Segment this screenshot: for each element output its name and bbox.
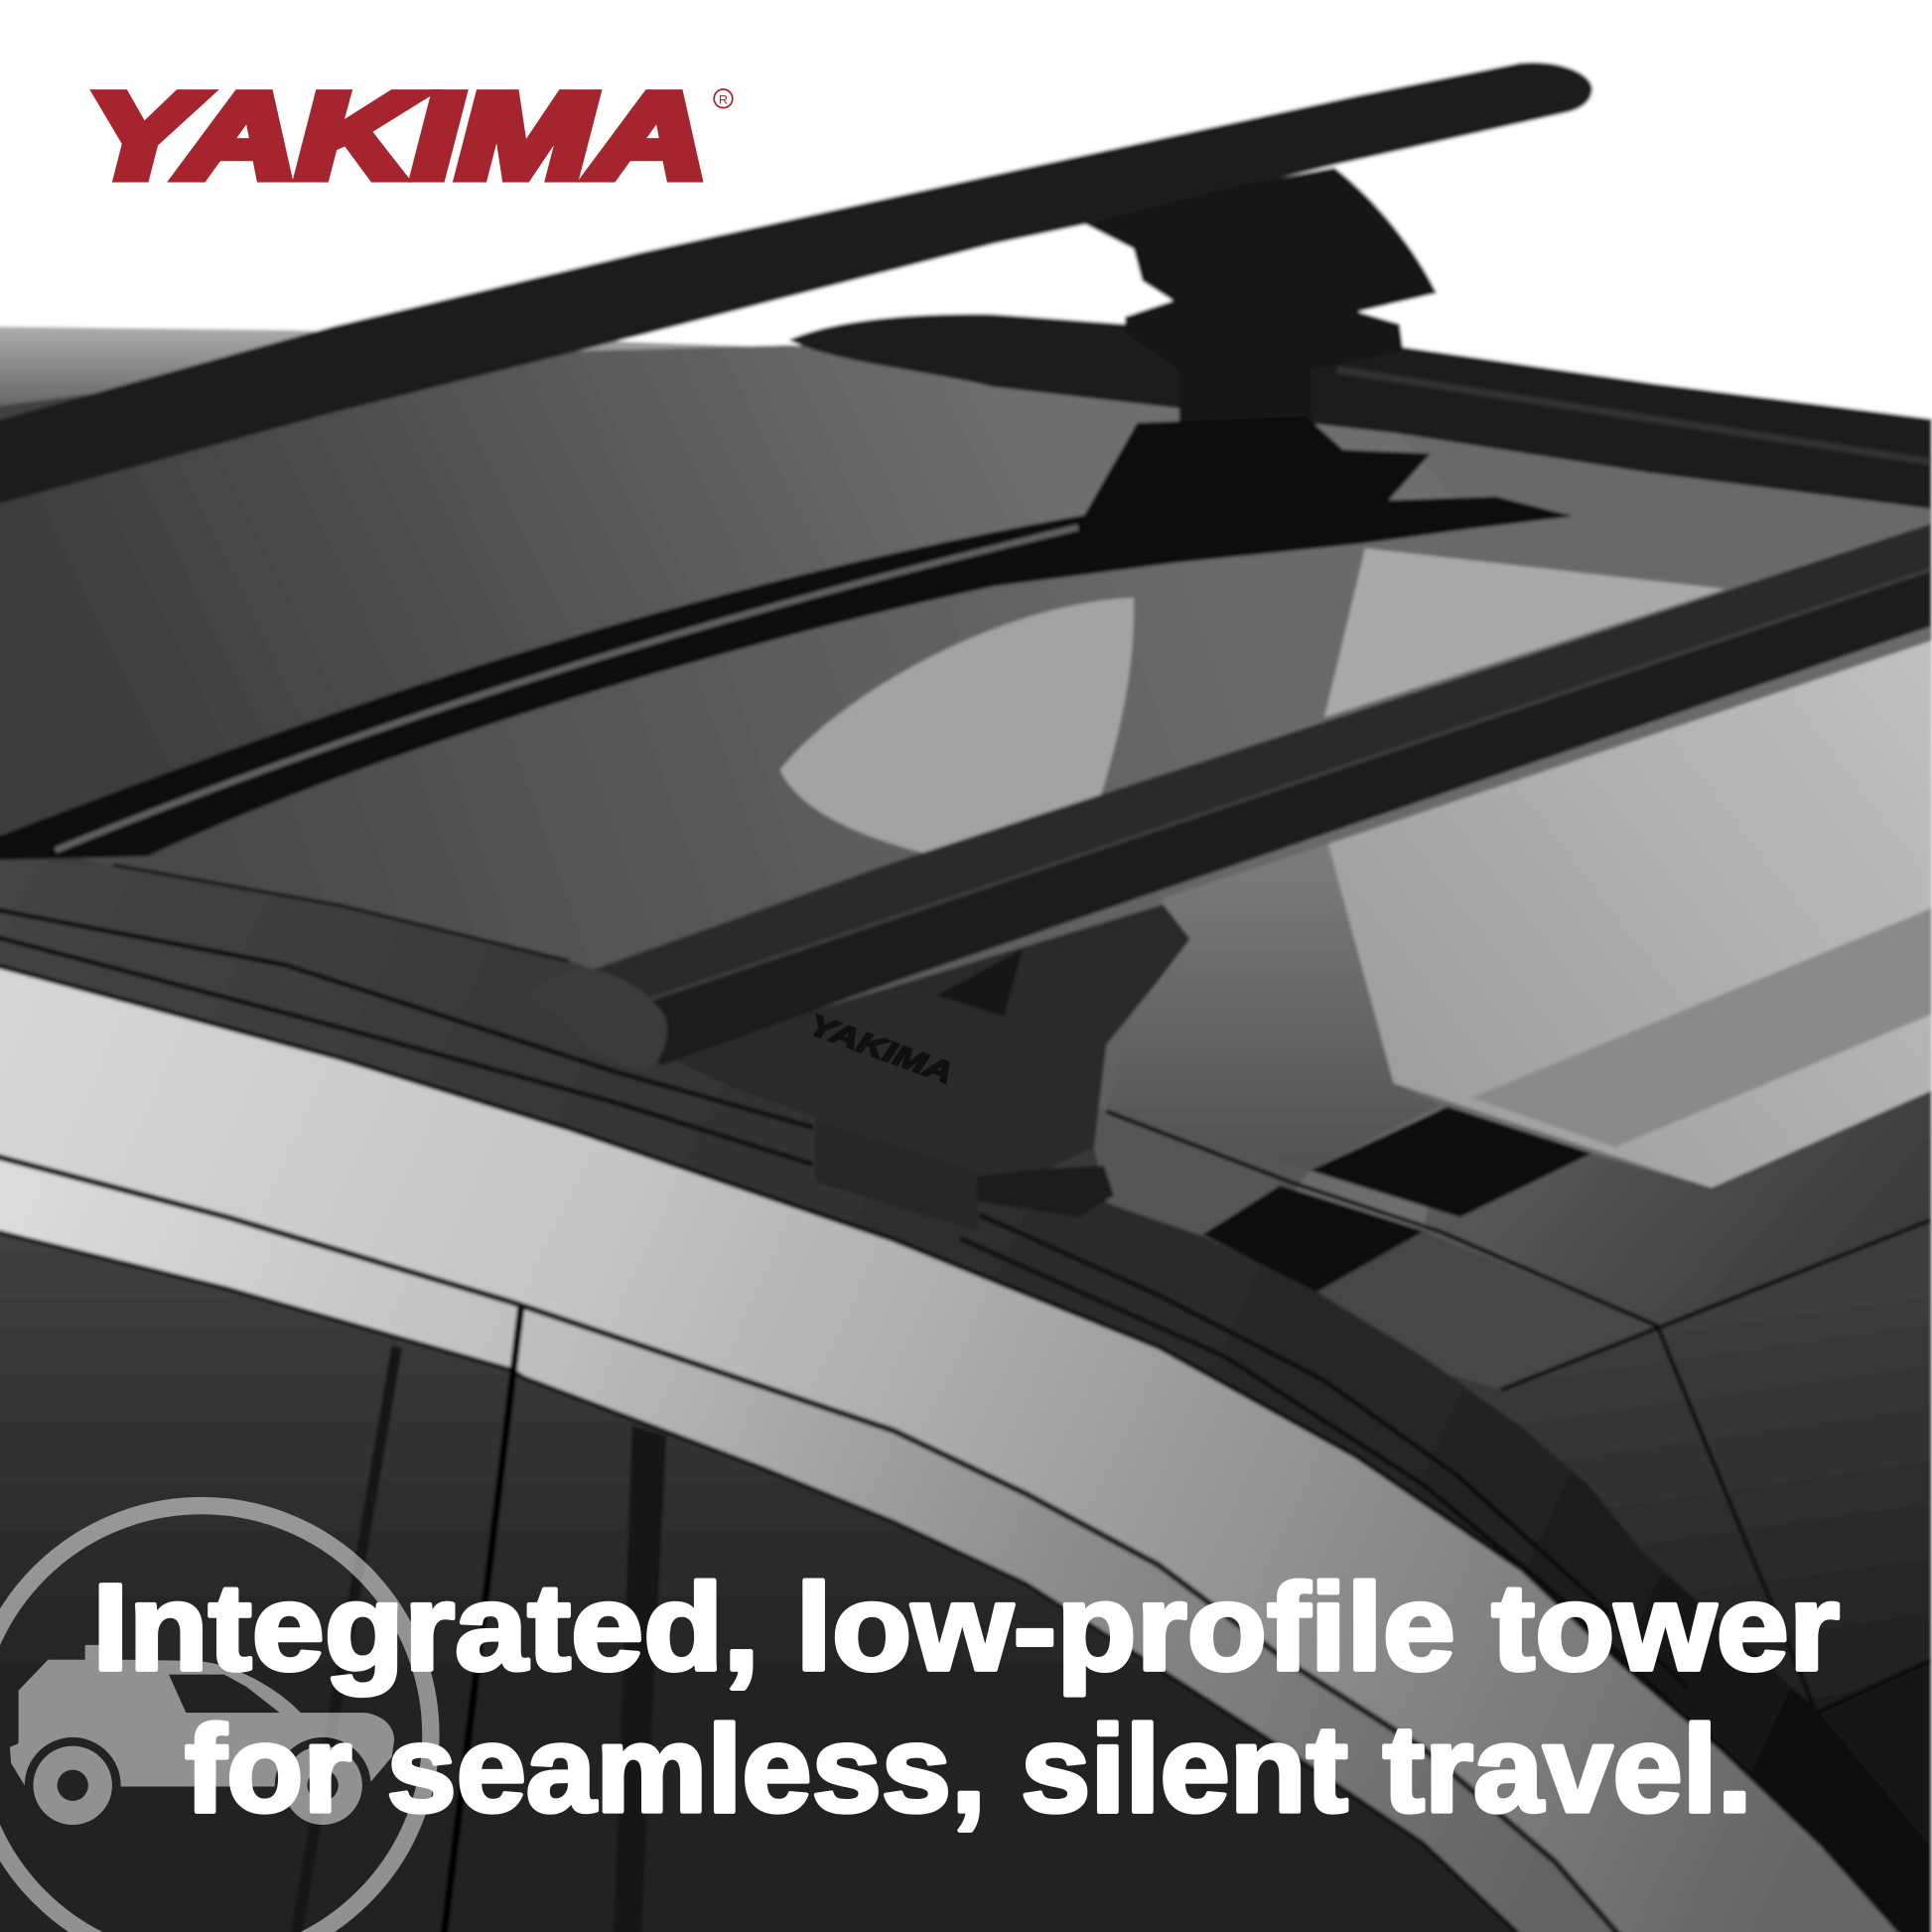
- front bar: [593, 523, 1932, 1066]
- window pillar left: [296, 1346, 397, 1932]
- upper glass right of tower: [1365, 434, 1932, 579]
- icon ring: [0, 1506, 431, 1932]
- rail groove lines: [0, 909, 1688, 1707]
- dark roof corner: [1727, 1660, 1932, 1932]
- roof panel lines: [1106, 1111, 1932, 1753]
- light reflection: centre: [780, 598, 1134, 857]
- black square upper: [1310, 1106, 1591, 1217]
- roof panel B below squares: [1232, 1231, 1657, 1390]
- front bar upper face: [593, 523, 1932, 1004]
- window pillar right: [614, 1426, 666, 1932]
- tower logo text: YAKIMA: [805, 1009, 957, 1090]
- front wheel: [283, 1746, 362, 1825]
- light reflection: right window: [1328, 640, 1932, 1187]
- side windows: [0, 1231, 1523, 1932]
- tower clamp bracket: [816, 1119, 977, 1231]
- light reflection: upper right: [1324, 548, 1725, 717]
- front tower: [664, 904, 1190, 1177]
- roof panel C right: [1501, 1220, 1932, 1753]
- roof panel behind tower: [1084, 1103, 1310, 1257]
- icon: car in circle: [0, 1506, 431, 1932]
- rear roof panel: [0, 327, 788, 425]
- tower base: [977, 1166, 1114, 1217]
- grey reflection column below bar: [1106, 844, 1442, 1171]
- roof panel A right: [1425, 1090, 1932, 1325]
- registered mark: [714, 89, 733, 108]
- dark roof base under panels: [1035, 1128, 1932, 1932]
- rear side rail: [788, 314, 1932, 509]
- front bar highlight: [647, 569, 1932, 1001]
- tower shadow: [936, 949, 1023, 1017]
- silver edge line: [0, 965, 1906, 1932]
- window top edge line: [0, 1231, 1523, 1932]
- window trim line: [0, 1156, 1621, 1932]
- rear tower: [1085, 168, 1437, 470]
- glass frame line: [113, 865, 569, 961]
- panoramic glass roof: [0, 345, 1932, 1232]
- roof rail black band: [0, 859, 1932, 1932]
- door pillar: [444, 1307, 521, 1932]
- rear rail highlight: [1337, 369, 1932, 462]
- front bar end cap: [530, 969, 667, 1070]
- lower silver strip: [0, 1156, 1621, 1932]
- gloss gap in reflected rail: [56, 527, 1078, 850]
- rear bar: [0, 63, 1592, 505]
- reflected rail: [0, 416, 1574, 860]
- headline: [92, 1560, 1840, 1838]
- headline line 2: for seamless, silent travel.: [185, 1701, 1752, 1838]
- silver side strip: [0, 965, 1906, 1932]
- black square lower: [1202, 1185, 1425, 1293]
- lower glass panel: [73, 523, 1932, 1115]
- car body: [10, 1645, 394, 1787]
- brand logo: YAKIMA: [86, 69, 707, 204]
- rear wheel: [34, 1746, 112, 1825]
- headline line 1: Integrated, low-profile tower: [92, 1560, 1840, 1697]
- registered mark: R: [719, 92, 728, 106]
- reflection stripe: [1471, 908, 1932, 1147]
